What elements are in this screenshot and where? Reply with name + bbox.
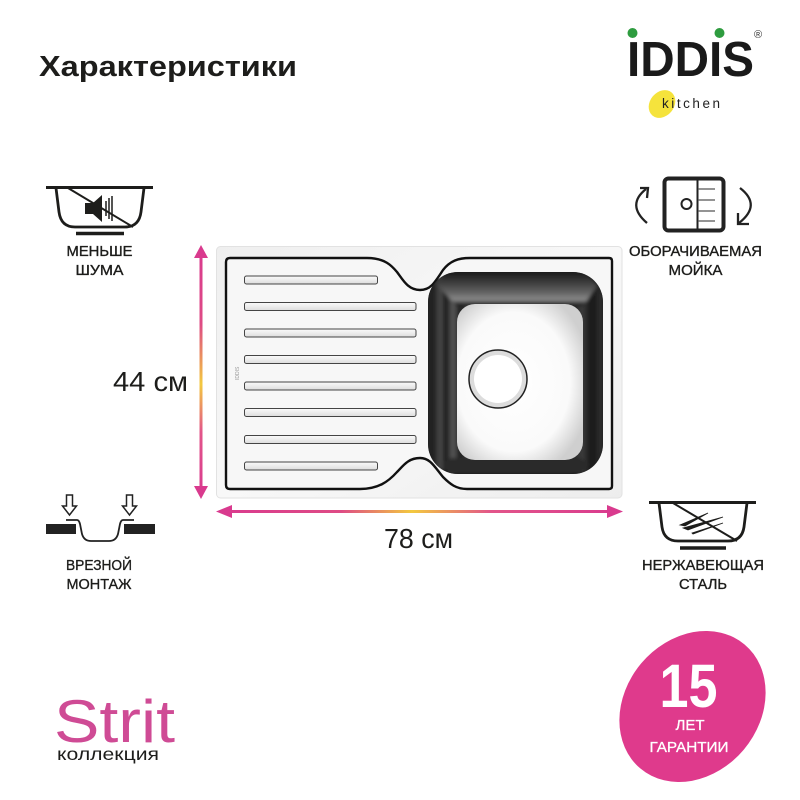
logo: IDDIS kitchen: kitchen bbox=[662, 96, 720, 111]
engraved brand mark: IDDIS bbox=[235, 366, 241, 380]
warranty badge: ЛЕТ bbox=[676, 717, 704, 734]
arrow: height bbox=[194, 245, 208, 499]
dimension: width: 78 см bbox=[384, 523, 453, 554]
warranty badge bbox=[589, 601, 796, 800]
label: reversible sink: МОЙКА bbox=[668, 261, 723, 279]
icon: reversible sink bbox=[636, 178, 751, 230]
drain bbox=[469, 350, 527, 408]
label: flush mounting: МОНТАЖ bbox=[66, 577, 132, 593]
label: stainless steel: СТАЛЬ bbox=[679, 577, 727, 593]
icon: stainless steel bbox=[649, 502, 756, 548]
label: less noise: МЕНЬШЕ bbox=[66, 244, 133, 260]
bowl floor bbox=[457, 304, 583, 460]
bowl bbox=[428, 272, 603, 474]
sink illustration bbox=[216, 246, 622, 498]
dimension: height: 44 см bbox=[113, 366, 188, 397]
logo: IDDIS kitchen: ® bbox=[754, 29, 762, 41]
title: Характеристики bbox=[39, 51, 297, 83]
logo: IDDIS kitchen bbox=[627, 28, 762, 123]
warranty badge: ГАРАНТИИ bbox=[650, 739, 728, 756]
collection label: коллекция bbox=[57, 744, 159, 764]
icon: less noise bbox=[46, 188, 153, 234]
sink plate bbox=[216, 246, 622, 498]
label: reversible sink: ОБОРАЧИВАЕМАЯ bbox=[629, 244, 762, 260]
collection name: Strit bbox=[54, 688, 175, 755]
logo: IDDIS kitchen: IDDIS bbox=[627, 33, 754, 87]
warranty badge: 15 bbox=[660, 652, 718, 720]
drainboard slots bbox=[244, 276, 416, 470]
label: less noise: ШУМА bbox=[76, 263, 124, 279]
arrow: width bbox=[216, 505, 623, 518]
icon: flush mounting bbox=[46, 495, 155, 541]
sink contour bbox=[226, 258, 612, 489]
label: stainless steel: НЕРЖАВЕЮЩАЯ bbox=[642, 558, 764, 574]
label: flush mounting: ВРЕЗНОЙ bbox=[66, 556, 132, 574]
